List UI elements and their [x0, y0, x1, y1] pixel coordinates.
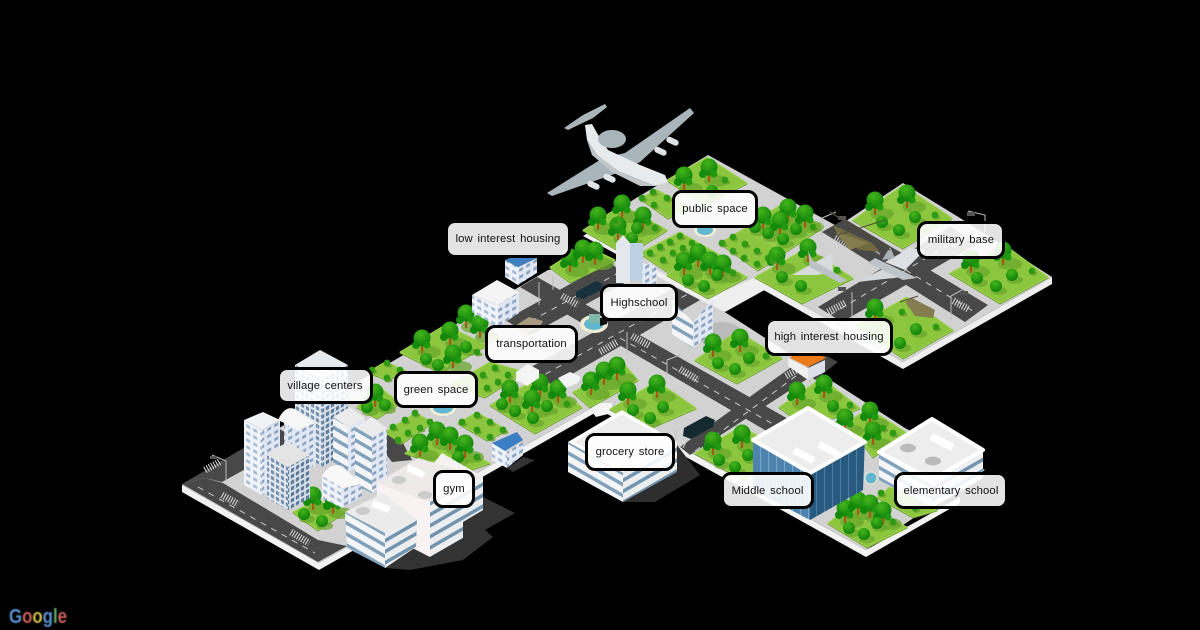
- label: public space: public space: [682, 203, 748, 215]
- building: elementary school: [879, 419, 983, 508]
- panel: ground platforms: [182, 155, 1052, 570]
- building: village center towers: [244, 350, 387, 510]
- building: grocery store: [568, 410, 700, 502]
- icon: jets and helicopters: [792, 212, 935, 318]
- label: grocery store: [585, 433, 675, 471]
- building: orange roof house: [788, 352, 838, 380]
- label: Middle school: Middle school: [732, 484, 803, 496]
- label: elementary school: [894, 472, 1008, 509]
- roads: [182, 219, 988, 562]
- label: green space: [394, 371, 478, 408]
- logo: Google: Google: [9, 606, 67, 628]
- label: high interest housing: high interest housing: [774, 331, 884, 343]
- label: Highschool: Highschool: [611, 296, 667, 308]
- label: low interest housing: low interest housing: [456, 233, 560, 245]
- building: grey block: [472, 280, 519, 327]
- label: grocery store: grocery store: [596, 446, 664, 458]
- label: Middle school: [721, 472, 814, 509]
- label: village centers: [277, 367, 373, 404]
- building: under top platform: [672, 300, 744, 350]
- label: public space: [672, 190, 758, 228]
- label: village centers: village centers: [287, 380, 363, 392]
- label: Highschool: [600, 284, 678, 321]
- icon: fountains: [430, 223, 877, 484]
- crosswalks and lane markings: [198, 226, 976, 553]
- icon: street lights: [210, 211, 985, 484]
- label: gym: [433, 470, 475, 508]
- icon: cars: [515, 281, 715, 439]
- building: low interest house: [505, 255, 537, 285]
- label: low interest housing: [445, 220, 571, 258]
- label: transportation: [485, 325, 578, 363]
- label: elementary school: elementary school: [904, 484, 998, 496]
- building: blue roof house: [492, 432, 535, 472]
- icon: airplane: [547, 104, 694, 196]
- label: military base: military base: [928, 234, 994, 246]
- label: military base: [917, 221, 1005, 259]
- building: gym: [345, 453, 515, 570]
- label: green space: green space: [404, 384, 468, 396]
- panel: green blocks: [293, 157, 1048, 547]
- label: high interest housing: [765, 318, 893, 356]
- building: central tower: [616, 235, 657, 287]
- label: gym: gym: [443, 483, 465, 495]
- label: transportation: transportation: [496, 338, 567, 350]
- trees and bushes: [298, 158, 1038, 543]
- building: middle school: [753, 408, 865, 520]
